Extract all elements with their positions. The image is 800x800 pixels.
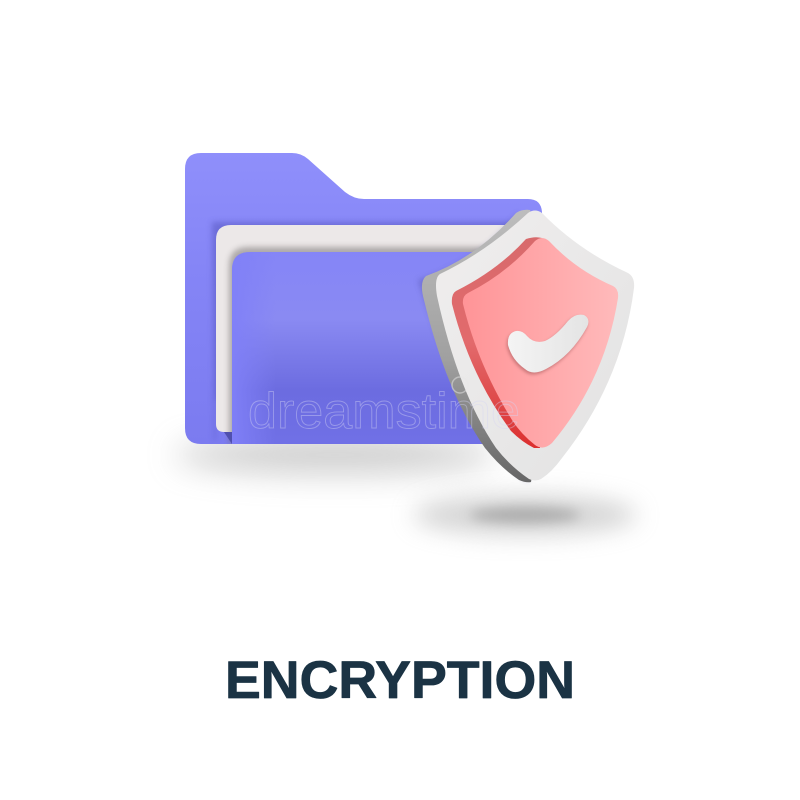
paper sheet — [212, 222, 545, 444]
checkmark shadow — [507, 317, 587, 374]
folder back with tab — [185, 153, 542, 444]
icon: shield — [418, 210, 634, 482]
shield light rim — [436, 210, 634, 480]
shield red side — [452, 237, 542, 448]
shadow: under shield — [413, 495, 637, 535]
checkmark — [508, 315, 588, 372]
folder front pocket — [232, 252, 482, 444]
shield red face — [463, 238, 618, 448]
shadow: under folder — [175, 437, 495, 473]
shield drop shadow — [418, 212, 528, 482]
watermark: dreamstime — [248, 383, 520, 439]
icon: folder — [185, 153, 545, 444]
infographic: encryption icon — [176, 153, 639, 699]
shield grey edge — [422, 210, 560, 482]
title: ENCRYPTION — [225, 651, 575, 710]
